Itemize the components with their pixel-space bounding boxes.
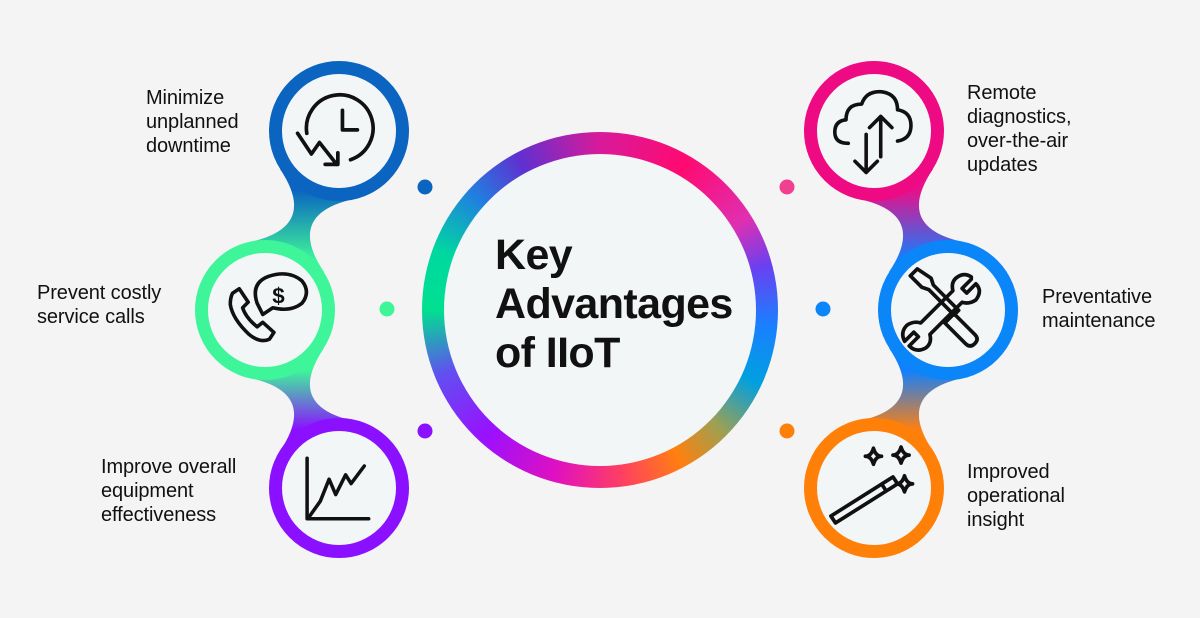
label: remote diagnostics: over-the-air bbox=[967, 130, 1068, 152]
label: remote diagnostics: diagnostics, bbox=[967, 106, 1071, 128]
label: remote diagnostics: Remote bbox=[967, 82, 1036, 104]
connector: left middle-bottom bbox=[250, 348, 354, 451]
connector: right middle-bottom bbox=[859, 348, 963, 451]
label: improve effectiveness: equipment bbox=[101, 480, 194, 502]
label: minimize downtime bbox=[146, 87, 239, 157]
dots bbox=[380, 180, 830, 438]
circle: equipment effectiveness bbox=[276, 424, 402, 552]
label: improve effectiveness: effectiveness bbox=[101, 504, 216, 526]
label: preventative maintenance: maintenance bbox=[1042, 310, 1155, 332]
label: improve effectiveness bbox=[101, 456, 236, 526]
label: preventative maintenance bbox=[1042, 286, 1155, 332]
label: remote diagnostics: updates bbox=[967, 154, 1037, 176]
icon: clock bbox=[298, 95, 373, 164]
connector: right top-middle bbox=[859, 169, 963, 272]
label: improve effectiveness: Improve overall bbox=[101, 456, 236, 478]
label: prevent service calls: service calls bbox=[37, 306, 145, 328]
circle: operational insight bbox=[810, 424, 938, 552]
circle: service calls bbox=[202, 246, 328, 374]
icon: tools bbox=[903, 269, 979, 350]
label: prevent service calls bbox=[37, 282, 162, 328]
title bbox=[495, 231, 733, 377]
connector: left top-middle bbox=[250, 169, 354, 272]
label: preventative maintenance: Preventative bbox=[1042, 286, 1152, 308]
label: remote diagnostics bbox=[967, 82, 1071, 176]
circle: preventative maintenance bbox=[884, 246, 1012, 374]
title: Advantages bbox=[495, 280, 733, 328]
label: minimize downtime: Minimize bbox=[146, 87, 224, 109]
icon: chart bbox=[307, 458, 369, 519]
label: improved insight bbox=[967, 461, 1065, 531]
label: minimize downtime: unplanned bbox=[146, 111, 239, 133]
title: Key bbox=[495, 231, 572, 279]
label: improved insight: Improved bbox=[967, 461, 1050, 483]
icon: magic wand bbox=[831, 447, 913, 523]
circle: remote diagnostics bbox=[810, 68, 938, 194]
circle: minimize downtime bbox=[276, 68, 402, 194]
central ring bbox=[422, 132, 778, 488]
label: prevent service calls: Prevent costly bbox=[37, 282, 161, 304]
label: improved insight: insight bbox=[967, 509, 1024, 531]
title: of IIoT bbox=[495, 329, 620, 377]
icon: cloud arrows bbox=[835, 92, 911, 172]
icon: phone and dollar: $ bbox=[272, 283, 285, 308]
label: minimize downtime: downtime bbox=[146, 135, 231, 157]
label: improved insight: operational bbox=[967, 485, 1065, 507]
